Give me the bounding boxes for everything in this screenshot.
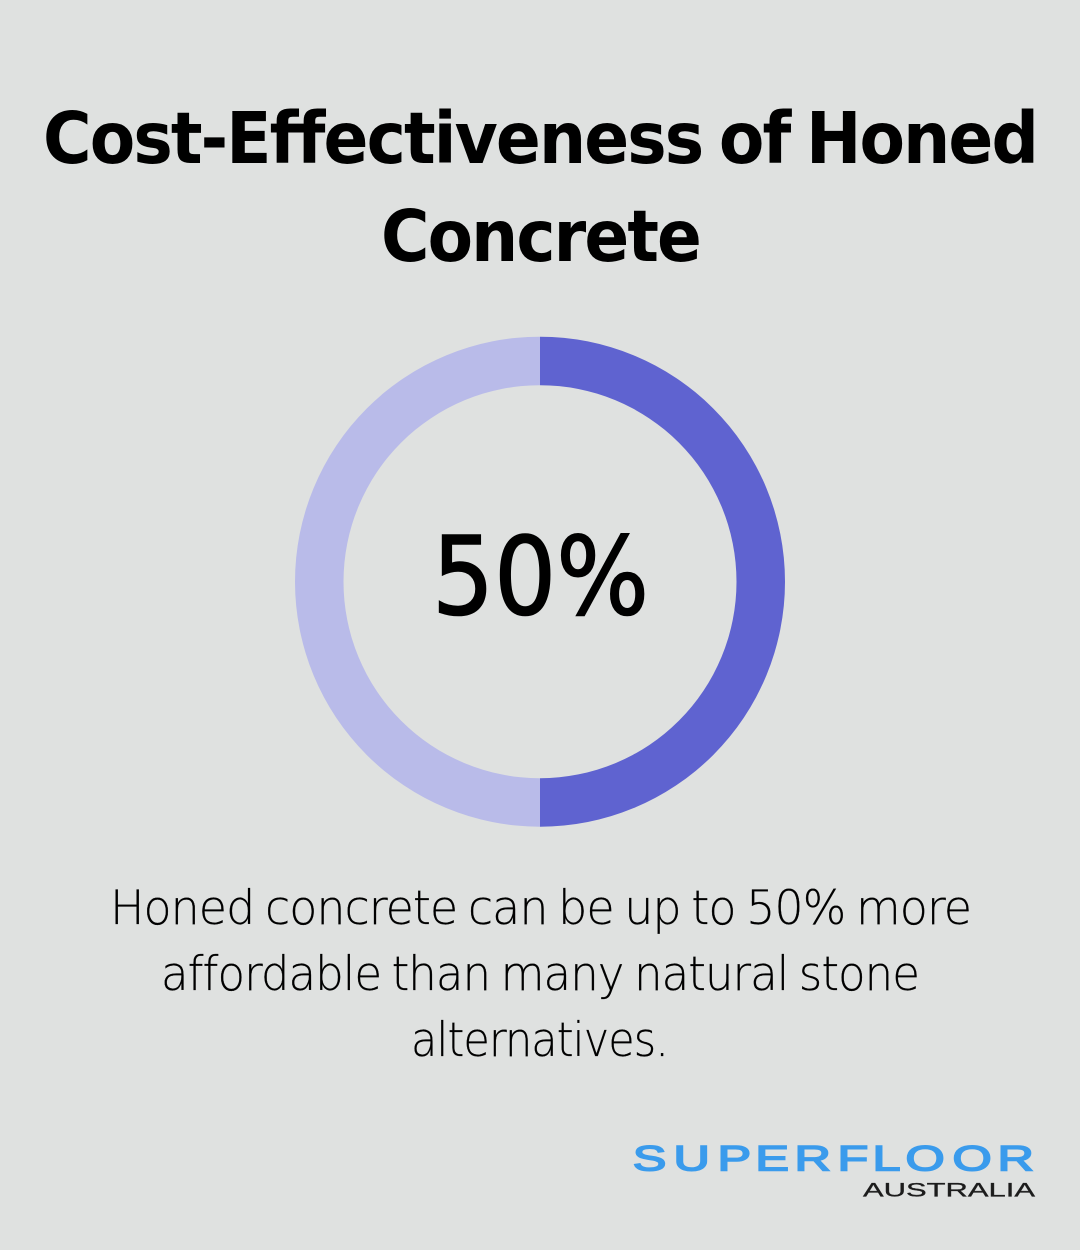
title: Concrete — [381, 195, 700, 278]
donut highlighted segment — [540, 337, 785, 827]
title: Cost-Effectiveness of Honed — [43, 97, 1037, 180]
description text: affordable than many natural stone — [161, 947, 919, 1002]
donut centre value: 50% — [432, 515, 649, 640]
description text: alternatives. — [411, 1013, 668, 1068]
logo: Superfloor Australia — [633, 1140, 1036, 1202]
logo wordmark: SUPERFLOOR — [633, 1140, 1034, 1179]
title — [43, 97, 1037, 278]
logo subtitle: AUSTRALIA — [863, 1180, 1036, 1202]
donut chart: 50% — [295, 337, 785, 827]
description text: Honed concrete can be up to 50% more — [110, 881, 971, 936]
donut remaining segment — [295, 337, 540, 827]
description text — [110, 881, 971, 1068]
